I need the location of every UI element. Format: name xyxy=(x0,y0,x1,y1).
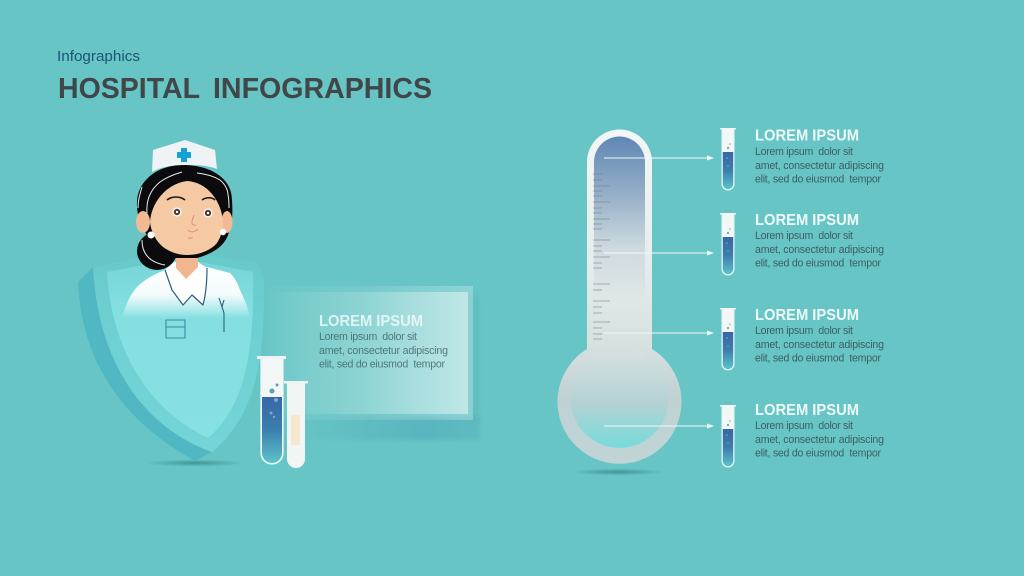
panel text: amet, consectetur adipiscing xyxy=(319,345,448,357)
title: HOSPITAL xyxy=(58,73,200,105)
arrow 3 xyxy=(604,330,714,336)
shield shadow xyxy=(145,460,245,466)
info panel: glass callout xyxy=(262,286,480,440)
item 2 text xyxy=(755,212,884,270)
item 2 text: LOREM IPSUM xyxy=(755,212,859,229)
nurse xyxy=(122,140,250,338)
item 3 text: elit, sed do eiusmod tempor xyxy=(755,352,881,364)
item 2 text: elit, sed do eiusmod tempor xyxy=(755,258,881,270)
arrow 4 xyxy=(604,424,714,428)
item 4 text: elit, sed do eiusmod tempor xyxy=(755,448,881,460)
item 1 text: amet, consectetur adipiscing xyxy=(755,160,884,172)
test tube 4 xyxy=(720,405,736,467)
earrings xyxy=(148,232,154,238)
ears xyxy=(136,211,150,233)
hair xyxy=(137,165,232,258)
subtitle: Infographics xyxy=(57,49,140,65)
item 1 text: LOREM IPSUM xyxy=(755,128,859,144)
scale ticks xyxy=(593,174,610,339)
thermometer xyxy=(558,130,681,464)
arrow 1 xyxy=(604,156,714,160)
item 1 text: elit, sed do eiusmod tempor xyxy=(755,174,881,186)
item 3 text xyxy=(755,307,884,364)
face xyxy=(150,181,223,255)
eyebrows xyxy=(167,197,215,200)
title xyxy=(58,73,432,105)
item 1 text xyxy=(755,128,884,186)
item 4 text: Lorem ipsum dolor sit xyxy=(755,420,853,432)
hair bun xyxy=(137,232,177,270)
item 3 text: amet, consectetur adipiscing xyxy=(755,339,884,351)
tall test tube xyxy=(257,356,286,464)
item 4 text: LOREM IPSUM xyxy=(755,402,859,419)
test tube 2 xyxy=(720,213,736,275)
panel text: elit, sed do eiusmod tempor xyxy=(319,358,445,370)
shield xyxy=(78,250,264,461)
panel text: Lorem ipsum dolor sit xyxy=(319,331,417,343)
item 1 text: Lorem ipsum dolor sit xyxy=(755,146,853,158)
cap cross xyxy=(177,148,191,162)
collar xyxy=(165,262,207,305)
nose and mouth xyxy=(188,215,198,238)
uniform xyxy=(122,267,250,318)
test tube 3 xyxy=(720,308,736,370)
pocket xyxy=(166,320,185,338)
item 4 text xyxy=(755,402,884,460)
arrow 2 xyxy=(604,250,714,256)
item 3 text: Lorem ipsum dolor sit xyxy=(755,325,853,337)
title: INFOGRAPHICS xyxy=(213,73,432,105)
short test tube xyxy=(284,381,308,468)
item 2 text: Lorem ipsum dolor sit xyxy=(755,230,853,242)
panel heading: LOREM IPSUM xyxy=(319,313,423,330)
hair strands xyxy=(138,172,229,213)
item 3 text: LOREM IPSUM xyxy=(755,307,859,324)
eyes xyxy=(172,208,182,216)
thermometer shadow xyxy=(571,468,665,476)
nurse cap xyxy=(152,140,217,172)
item 4 text: amet, consectetur adipiscing xyxy=(755,434,884,446)
item 2 text: amet, consectetur adipiscing xyxy=(755,244,884,256)
shirt fold xyxy=(219,298,224,332)
test tube 1 xyxy=(720,128,736,190)
neck xyxy=(176,250,198,279)
